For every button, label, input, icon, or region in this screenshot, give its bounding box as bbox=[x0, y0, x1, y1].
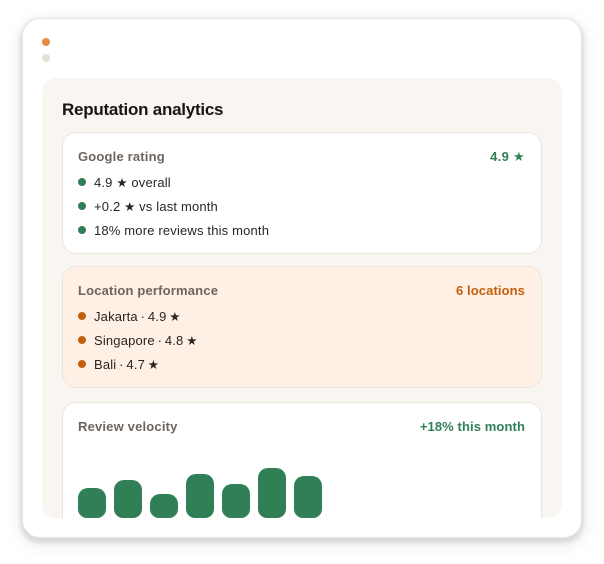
bar chart bbox=[78, 468, 322, 518]
bullet: Bali: Bali · 4.7 ★ bbox=[94, 357, 159, 372]
window dot: grey bbox=[42, 54, 50, 62]
locations count: 6 locations bbox=[456, 283, 525, 298]
heading: Reputation analytics bbox=[62, 100, 223, 119]
panel: reputation analytics bbox=[42, 78, 562, 518]
Review velocity label: Review velocity bbox=[78, 419, 178, 434]
bullet: more reviews: 18% more reviews this month bbox=[94, 223, 269, 238]
panel: location performance bbox=[62, 266, 542, 388]
velocity value: +18% this month bbox=[420, 419, 525, 434]
panel: Google rating bbox=[62, 132, 542, 254]
Location performance label: Location performance bbox=[78, 283, 218, 298]
bullet: Jakarta: Jakarta · 4.9 ★ bbox=[94, 309, 180, 324]
Google rating label: Google rating bbox=[78, 149, 165, 164]
Google rating value: 4.9 ★ bbox=[490, 149, 525, 164]
panel: review velocity bbox=[62, 402, 542, 542]
bullet: overall: 4.9 ★ overall bbox=[94, 175, 171, 190]
window dot: orange bbox=[42, 38, 50, 46]
bullet: Singapore: Singapore · 4.8 ★ bbox=[94, 333, 197, 348]
bullet: versus last month: +0.2 ★ vs last month bbox=[94, 199, 218, 214]
